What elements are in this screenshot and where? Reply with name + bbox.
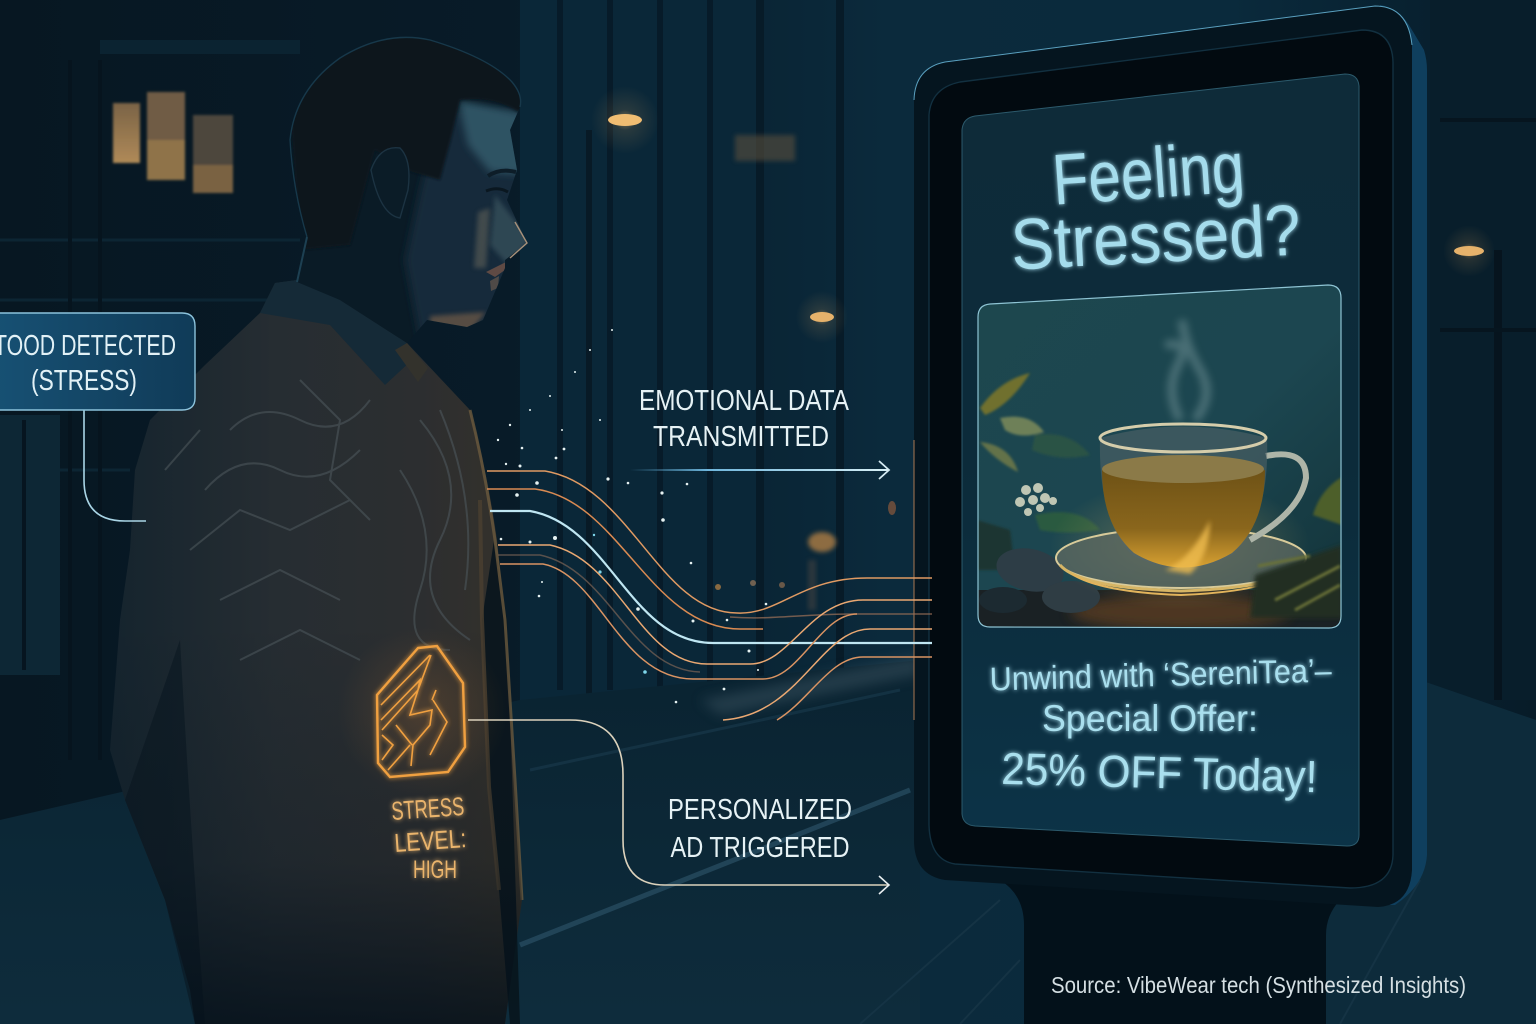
arrow: sleeve to personalized ad	[468, 720, 889, 894]
stones	[996, 548, 1064, 592]
building left	[0, 40, 300, 760]
lips	[486, 262, 506, 277]
source caption: Source: VibeWear tech (Synthesized Insights)	[1051, 972, 1466, 998]
screen headline: Stressed?	[1009, 190, 1303, 286]
right side buildings	[1430, 0, 1536, 700]
screen offer text	[989, 652, 1333, 802]
herbs	[1250, 545, 1342, 618]
face base tone	[404, 112, 520, 330]
screen headline: Feeling	[1050, 127, 1247, 221]
head	[292, 38, 526, 332]
inner bezel	[929, 30, 1393, 888]
flowers	[1015, 483, 1057, 516]
data stream wires	[487, 471, 932, 720]
orange edge reflection	[913, 440, 915, 720]
handle	[1250, 454, 1306, 540]
label: emotional data transmitted	[639, 385, 850, 453]
lit rim on sleeve	[470, 410, 522, 900]
arrow: to kiosk	[630, 461, 889, 479]
glow	[1065, 502, 1295, 600]
label: personalized ad triggered: AD TRIGGERED	[670, 832, 850, 864]
screen offer text: Unwind with ‘SereniTea’–	[989, 652, 1333, 697]
lit nose and cheek	[490, 197, 526, 262]
side panel	[1380, 5, 1427, 905]
lit windows	[113, 92, 233, 193]
steam	[1165, 320, 1206, 420]
building middle	[520, 0, 840, 710]
screen headline	[1009, 127, 1303, 286]
text: stress level high: LEVEL:	[393, 823, 467, 858]
street lamps	[591, 86, 1495, 343]
cup	[1100, 426, 1268, 534]
hair	[292, 38, 520, 248]
vertical dark fade	[110, 620, 522, 1024]
data particles	[497, 329, 767, 703]
screen offer text: Special Offer:	[1042, 698, 1258, 739]
screen offer text: 25% OFF Today!	[1001, 743, 1318, 802]
kiosk: digital display	[914, 5, 1427, 1024]
street ground	[0, 660, 920, 1024]
post	[1000, 880, 1340, 1024]
screen	[962, 74, 1359, 846]
callout: mood detected: (STRESS)	[31, 365, 137, 397]
jacket	[110, 280, 522, 1024]
label: emotional data transmitted: TRANSMITTED	[653, 421, 829, 453]
text: stress level high	[390, 791, 467, 884]
chin warm light	[428, 310, 486, 327]
jacket circuit pattern	[165, 380, 470, 660]
outer frame	[914, 6, 1412, 907]
label: personalized ad triggered: PERSONALIZED	[668, 794, 852, 826]
tea product photo	[977, 285, 1342, 630]
saucer	[1056, 528, 1306, 588]
label: personalized ad triggered	[668, 794, 852, 864]
distant blurred lights	[715, 501, 896, 610]
callout: mood detected: TOOD DETECTED	[0, 330, 176, 362]
arm gap shadow	[482, 540, 520, 1024]
head rim light	[290, 37, 527, 282]
label: emotional data transmitted: EMOTIONAL DATA	[639, 385, 850, 417]
text: stress level high: HIGH	[413, 856, 457, 884]
ear	[371, 148, 409, 218]
collar	[260, 280, 412, 385]
leaves	[977, 373, 1342, 570]
man figure	[110, 30, 530, 1024]
lit forehead	[458, 100, 518, 177]
text: stress level high: STRESS	[390, 791, 465, 826]
icon: glowing sleeve stress badge	[337, 627, 507, 797]
callout: mood detected	[0, 313, 195, 521]
